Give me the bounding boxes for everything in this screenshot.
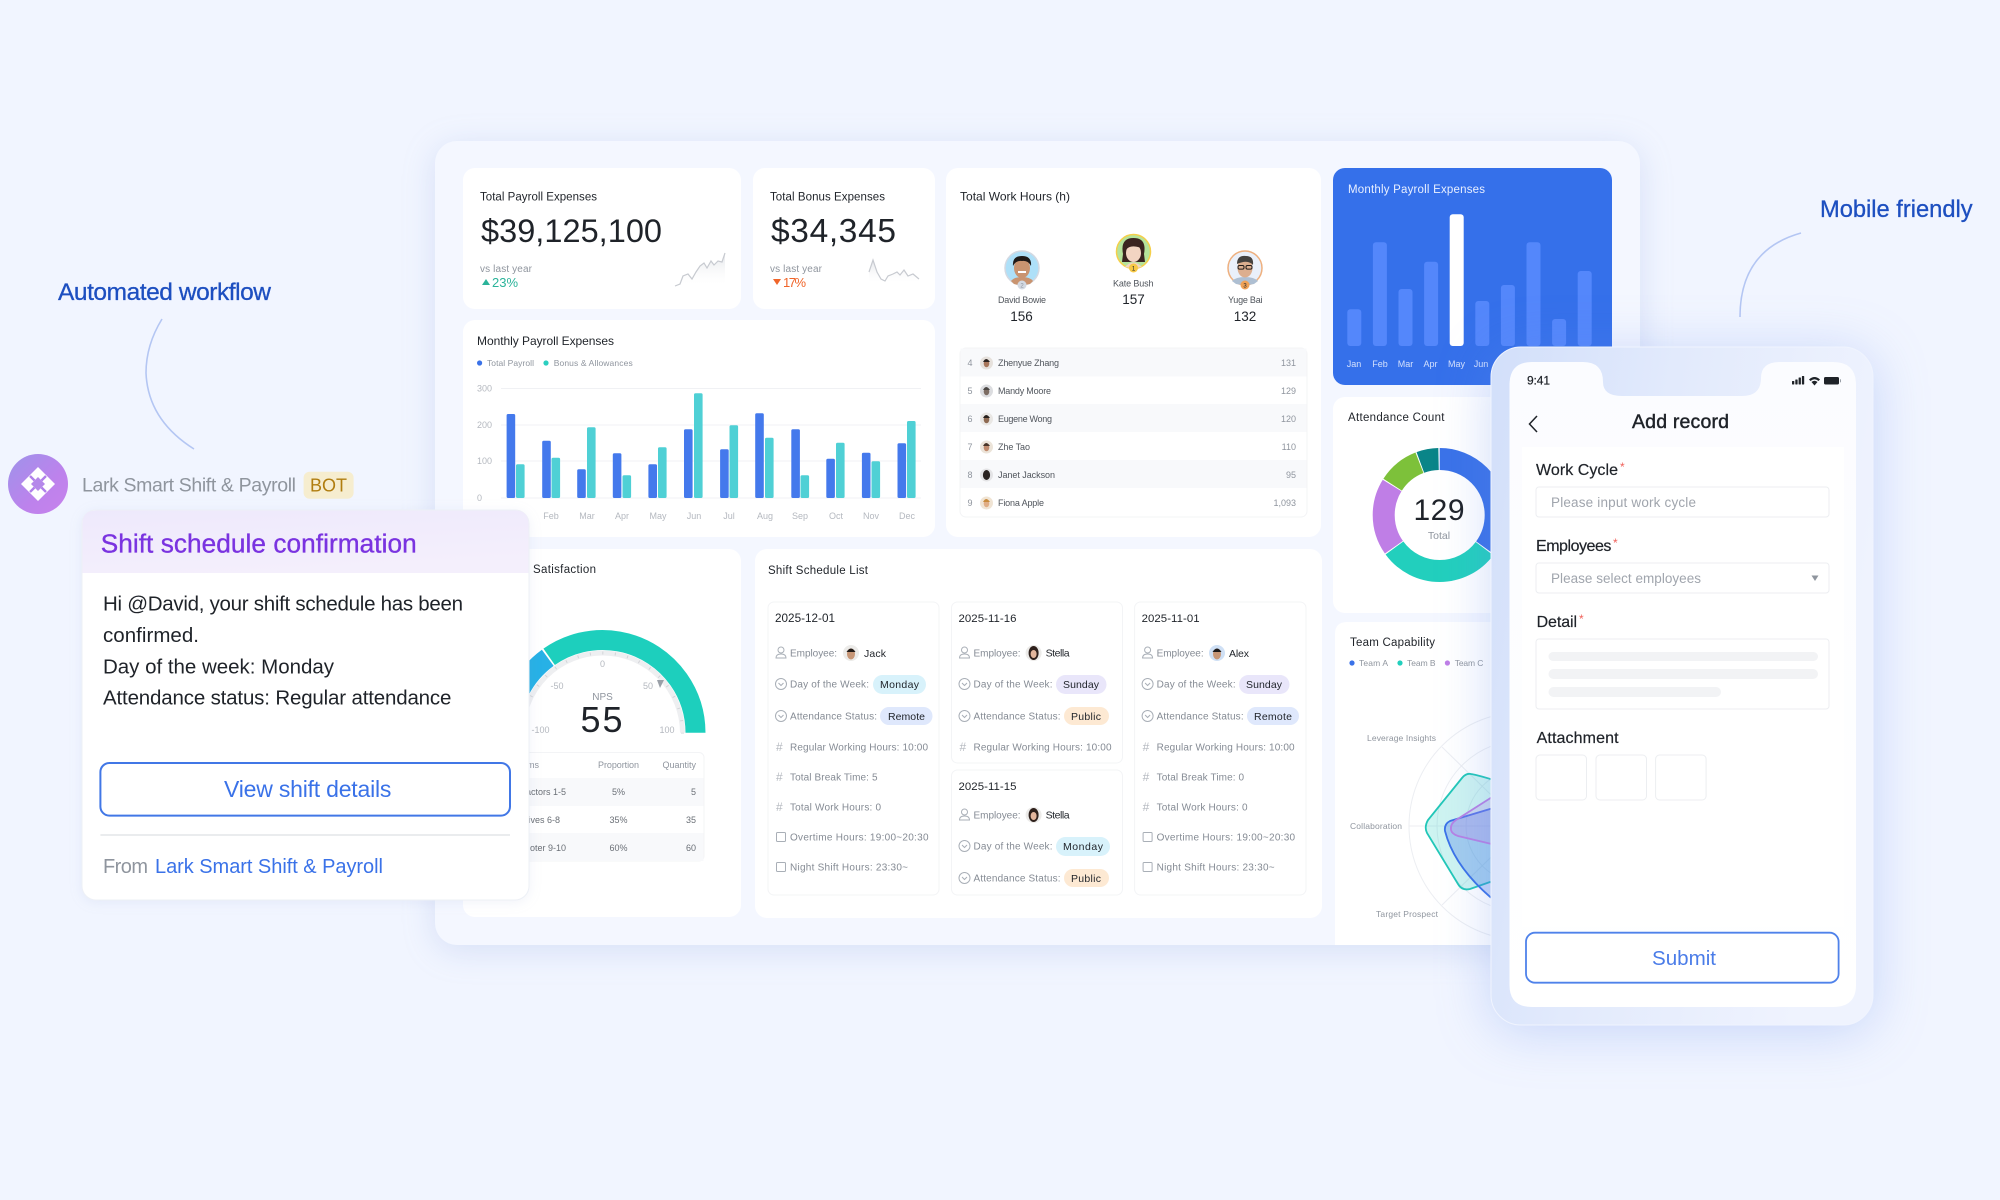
field: attachment: Attachment [1537, 730, 1619, 747]
title: Shift Schedule List [768, 565, 869, 577]
row 6: 6 [967, 414, 973, 424]
row 8: 95 [1286, 470, 1296, 480]
employee row: Jack [864, 648, 887, 660]
month labels: Mar [1398, 359, 1413, 369]
legend: Team B [1407, 658, 1436, 668]
growth: 23% [492, 275, 518, 290]
attendance row [959, 869, 1109, 887]
comparison label: vs last year [770, 264, 823, 275]
bar chart: Dec [899, 511, 915, 521]
day of week row: Monday [1063, 841, 1104, 853]
card header [82, 510, 528, 573]
name: Yuge Bai: Yuge Bai [1228, 295, 1262, 305]
sparkline [675, 253, 725, 287]
hours rows [1143, 740, 1296, 874]
NPS gauge: NPS [592, 692, 613, 703]
row 5: Mandy Moore [998, 386, 1051, 396]
hours rows: # [776, 800, 783, 814]
NPS table: Proportion [598, 760, 639, 770]
attendance row [1142, 707, 1299, 725]
employee row: Employee: [974, 648, 1020, 660]
employee row: Employee: [790, 648, 837, 660]
row 9: Fiona Apple [998, 498, 1044, 508]
day of week row [776, 675, 926, 694]
panel: total bonus expenses [753, 168, 935, 309]
row 5: 5 [967, 386, 973, 396]
panel: main dashboard [435, 141, 1640, 945]
employee row [776, 645, 887, 661]
value 156: 156 [1010, 309, 1033, 324]
row 8: Janet Jackson [998, 470, 1055, 480]
ranking list [960, 348, 1307, 517]
attendance row: Remote [1254, 711, 1292, 723]
NPS table: 5 [691, 787, 696, 797]
field: detail [1536, 612, 1829, 709]
attendance row: Attendance Status: [1157, 712, 1244, 722]
field: employees [1536, 536, 1829, 593]
bar chart: Apr [615, 511, 629, 521]
row 6: 120 [1281, 414, 1296, 424]
employee row [960, 645, 1070, 661]
bar chart: 300 [477, 384, 492, 394]
NPS table: 5% [612, 787, 625, 797]
button: view shift details: View shift details [224, 776, 391, 802]
button: view shift details [100, 763, 510, 816]
field: work cycle: Please input work cycle [1551, 495, 1696, 510]
row 7: 7 [967, 442, 973, 452]
NPS table: Promoter 9-10 [508, 843, 566, 853]
NPS table: 35% [609, 815, 628, 825]
NPS table: Quantity [662, 760, 696, 770]
field: work cycle: * [1620, 460, 1625, 474]
bar chart [477, 384, 921, 521]
name: Kate Bush: Kate Bush [1113, 278, 1154, 288]
radar chart: Leverage Insights [1367, 733, 1436, 743]
avatar: Kate Bush [1116, 234, 1150, 272]
NPS table: Passives 6-8 [508, 815, 560, 825]
attendance row: Attendance Status: [790, 712, 877, 722]
amount: $39,125,100 [481, 213, 662, 249]
attendance row: Attendance Status: [974, 874, 1060, 884]
avatar: Yuge Bai [1228, 251, 1262, 290]
panel: satisfaction [463, 549, 741, 917]
field: work cycle: Work Cycle [1536, 462, 1618, 479]
bar chart: Jun [687, 511, 701, 521]
row 5 [967, 384, 1296, 398]
panel: team capability [1335, 622, 1637, 945]
legend: Team C [1455, 658, 1483, 668]
panel: total work hours [946, 168, 1321, 537]
NPS table: 35 [686, 815, 696, 825]
donut total: 129 [1414, 494, 1464, 527]
bar chart: Jan [508, 511, 522, 521]
NPS gauge: 50 [643, 681, 653, 691]
NPS gauge [530, 630, 706, 734]
legend: Bonus & Allowances [554, 358, 633, 368]
title: Monthly Payroll Expenses [1348, 184, 1485, 196]
NPS gauge: 0 [600, 659, 605, 669]
bar chart: 100 [477, 456, 492, 466]
source line: From [103, 856, 148, 878]
message body: Hi @David, your shift schedule has been [103, 593, 463, 616]
row 5: 129 [1281, 386, 1296, 396]
schedule card 2025-12-01 [768, 602, 939, 895]
schedule card 2025-11-16 [952, 602, 1122, 763]
row 7: Zhe Tao [998, 442, 1030, 452]
avatar: Kate Bush: 1 [1132, 266, 1136, 272]
employee row: Alex [1229, 648, 1250, 660]
day of week row: Monday [880, 679, 920, 691]
title: Attendance Count [1348, 412, 1445, 424]
panel: monthly payroll bar chart [463, 320, 935, 537]
hours rows: Total Break Time: 0 [1157, 772, 1245, 784]
button: submit: Submit [1652, 947, 1716, 970]
heading: Mobile friendly: Mobile friendly [1820, 197, 1973, 223]
attendance row: Attendance Status: [974, 712, 1060, 722]
status bar [1527, 374, 1841, 388]
value 157: 157 [1122, 292, 1145, 307]
title: Monthly Payroll Expenses [477, 334, 614, 348]
sparkline [869, 260, 919, 284]
row 4: 131 [1281, 358, 1296, 368]
date: 2025-11-01 [1142, 613, 1200, 625]
avatar: Yuge Bai: 3 [1243, 284, 1247, 290]
month labels: Jan [1347, 359, 1361, 369]
NPS gauge: -100 [531, 725, 550, 735]
day of week row: Sunday [1246, 679, 1283, 691]
hours rows: # [1143, 800, 1150, 814]
heading: Automated workflow: Automated workflow [58, 279, 271, 306]
comparison label: vs last year [480, 264, 533, 275]
NPS gauge: -50 [550, 681, 564, 691]
hours row: Regular Working Hours: 10:00 [974, 742, 1112, 754]
attendance row [776, 707, 932, 725]
panel: shift schedule list [755, 549, 1322, 918]
NPS gauge: 100 [659, 725, 675, 735]
status bar: 9:41 [1527, 374, 1550, 388]
NPS table: 60% [609, 843, 628, 853]
schedule card 2025-11-15 [952, 770, 1122, 895]
attendance row [959, 707, 1109, 725]
hours rows: Total Work Hours: 0 [1157, 802, 1248, 814]
button: submit [1526, 933, 1839, 983]
hours rows: # [776, 740, 783, 754]
bar chart: 0 [477, 493, 482, 503]
row 9: 9 [967, 498, 973, 508]
arrow: mobile curve [1740, 233, 1801, 317]
bot badge: BOT [310, 476, 347, 496]
date: 2025-11-16 [958, 613, 1016, 625]
day of week row: Day of the Week: [1157, 680, 1236, 690]
NPS table [476, 752, 704, 861]
avatar: David Bowie [1005, 251, 1039, 290]
radar chart: Target Prospect [1376, 909, 1439, 919]
day of week row [1142, 675, 1290, 694]
NPS table: 60 [686, 843, 696, 853]
field: employees: * [1613, 536, 1618, 550]
card title: Total Bonus Expenses [770, 192, 885, 204]
bot badge [304, 472, 354, 499]
field: employees: Employees [1536, 538, 1611, 555]
hours rows: Total Break Time: 5 [790, 772, 878, 784]
hours rows: # [776, 770, 783, 784]
panel: chat card [82, 510, 529, 900]
day of week row: Sunday [1063, 679, 1100, 691]
message body: Attendance status: Regular attendance [103, 686, 451, 709]
title: Satisfaction [533, 564, 596, 576]
field: detail: * [1579, 612, 1584, 626]
screen title: Add record [1632, 411, 1729, 433]
radar chart: Collaboration [1350, 821, 1402, 831]
employee row: Stella [1046, 648, 1070, 660]
back chevron [1530, 416, 1537, 432]
bars [1347, 214, 1592, 346]
row 7: 110 [1282, 442, 1296, 452]
message body: Day of the week: Monday [103, 656, 335, 679]
month labels: May [1448, 359, 1465, 369]
attendance row: Public [1071, 711, 1101, 723]
title: Team Capability [1350, 637, 1435, 649]
panel: attendance count [1333, 397, 1612, 613]
decline [773, 275, 806, 290]
field: attachment [1536, 730, 1706, 800]
row 6 [967, 412, 1296, 426]
row 4: 4 [967, 358, 973, 368]
card header: Shift schedule confirmation [101, 528, 417, 558]
legend: Team A [1359, 658, 1388, 668]
hours rows: # [1143, 770, 1150, 784]
hours rows: Total Work Hours: 0 [790, 802, 881, 814]
NPS table: Detractors 1-5 [509, 787, 566, 797]
message body: confirmed. [103, 624, 199, 647]
donut label: Total [1428, 530, 1450, 542]
row 9 [967, 496, 1296, 510]
value 132: 132 [1234, 309, 1256, 324]
day of week row: Day of the Week: [790, 680, 869, 690]
field: detail: Detail [1537, 614, 1577, 631]
NPS table: Items [517, 760, 539, 770]
date: 2025-12-01 [775, 612, 835, 625]
phone mockup [1491, 347, 1873, 1025]
schedule card 2025-11-01 [1135, 602, 1306, 895]
hours rows: # [1143, 740, 1150, 754]
hours rows: Overtime Hours: 19:00~20:30 [1157, 832, 1296, 844]
card title: Total Payroll Expenses [480, 192, 597, 204]
avatar: David Bowie: 2 [1020, 284, 1024, 290]
field: work cycle [1536, 460, 1829, 517]
month labels: Jun [1474, 359, 1488, 369]
hours rows: Regular Working Hours: 10:00 [790, 742, 928, 754]
legend [1349, 658, 1483, 668]
decline: 17% [783, 275, 806, 290]
bar chart: Nov [863, 511, 879, 521]
bar chart: Sep [792, 511, 808, 521]
amount: $34,345 [771, 213, 896, 250]
bar chart: Oct [829, 511, 843, 521]
hours rows: Night Shift Hours: 23:30~ [790, 862, 908, 874]
panel: total payroll expenses [463, 168, 741, 309]
day of week row: Day of the Week: [974, 842, 1052, 852]
employee row: Employee: [974, 810, 1020, 822]
day of week row: Day of the Week: [974, 680, 1052, 690]
row 6: Eugene Wong [998, 414, 1052, 424]
row 8: 8 [967, 470, 973, 480]
day of week row [959, 837, 1110, 856]
day of week row [959, 675, 1106, 694]
bar chart: Jul [723, 511, 735, 521]
row 8 [967, 468, 1296, 482]
hours row: # [960, 740, 966, 754]
employee row: Employee: [1157, 648, 1204, 660]
icon: bot logo [8, 454, 68, 514]
title: Total Work Hours (h) [960, 190, 1070, 204]
month labels: Feb [1372, 359, 1388, 369]
name: David Bowie: David Bowie [998, 295, 1046, 305]
hours rows [776, 740, 929, 874]
date: 2025-11-15 [958, 781, 1016, 793]
row 4 [967, 356, 1296, 370]
attendance row: Public [1071, 873, 1101, 885]
bar chart: Feb [543, 511, 559, 521]
bar chart: Mar [579, 511, 595, 521]
employee row [960, 807, 1070, 823]
legend [477, 358, 633, 368]
panel: blue monthly payroll [1333, 168, 1612, 385]
hours rows: Overtime Hours: 19:00~20:30 [790, 832, 929, 844]
radar chart [1350, 712, 1637, 940]
month labels [1347, 359, 1488, 369]
employee row [1143, 645, 1250, 661]
source line: Lark Smart Shift & Payroll [155, 856, 383, 878]
attendance row: Remote [888, 711, 925, 723]
NPS gauge: 55 [580, 699, 622, 740]
hours rows: Night Shift Hours: 23:30~ [1157, 862, 1275, 874]
bar chart: May [649, 511, 667, 521]
arrow: workflow curve [146, 319, 194, 449]
bar chart: 200 [477, 420, 492, 430]
row 9: 1,093 [1273, 498, 1296, 508]
field: employees: Please select employees [1551, 571, 1701, 586]
employee row: Stella [1046, 810, 1070, 822]
row 7 [967, 440, 1296, 454]
donut chart [1384, 459, 1496, 571]
bar chart: Aug [757, 511, 773, 521]
row 4: Zhenyue Zhang [998, 358, 1059, 368]
month labels: Apr [1423, 359, 1438, 369]
hours rows: Regular Working Hours: 10:00 [1157, 742, 1295, 754]
bot name: Lark Smart Shift & Payroll [82, 474, 296, 496]
legend: Total Payroll [487, 358, 534, 368]
message body [103, 593, 463, 709]
